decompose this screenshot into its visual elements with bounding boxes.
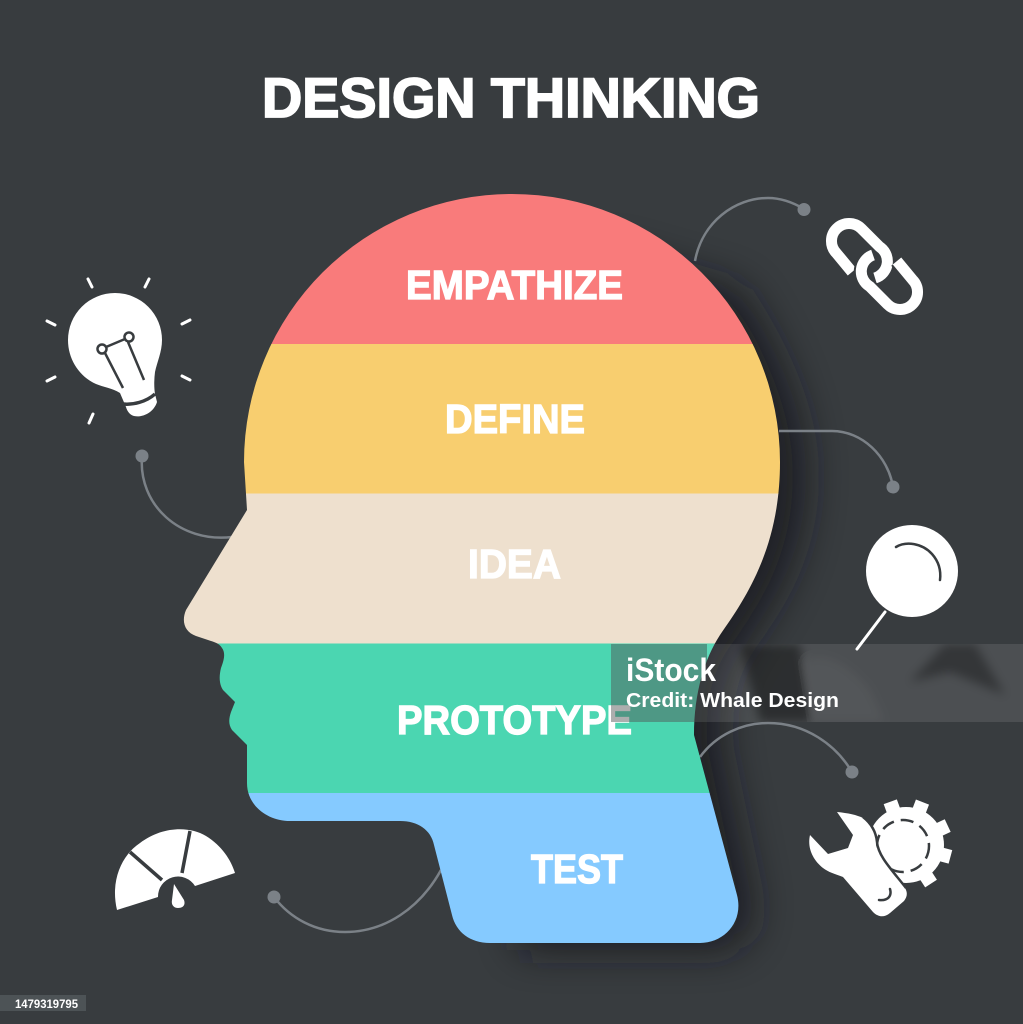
- band: prototype: [218, 644, 715, 794]
- icon: chain link: [831, 223, 918, 310]
- watermark logo: iStock: [626, 652, 716, 688]
- title: DESIGN THINKING: [262, 66, 760, 129]
- band: define: [244, 344, 780, 494]
- connector: bulb icon: [136, 450, 232, 538]
- image id tag: [0, 995, 86, 1011]
- label: empathize: EMPATHIZE: [406, 262, 623, 308]
- connector: magnifier icon: [779, 431, 900, 494]
- icon: wrench and gear: [809, 799, 952, 916]
- label: idea: IDEA: [468, 541, 561, 587]
- watermark band: [611, 644, 1023, 722]
- icon: magnifier: [857, 525, 958, 649]
- head shadow: [500, 250, 806, 950]
- head diagram: [170, 190, 790, 948]
- connector: gauge icon: [268, 870, 441, 932]
- band: test: [248, 793, 738, 943]
- label: prototype: PROTOTYPE: [397, 697, 632, 743]
- watermark credit: Credit: Whale Design: [626, 690, 839, 712]
- image id tag: 1479319795: [15, 999, 79, 1011]
- connector: link icon: [695, 198, 810, 261]
- band: empathize: [271, 194, 753, 344]
- band: idea: [170, 494, 790, 644]
- icon: light bulb: [47, 279, 190, 423]
- label: test: TEST: [531, 846, 623, 892]
- label: define: DEFINE: [445, 396, 585, 442]
- connector: gear icon: [700, 723, 858, 778]
- icon: gauge: [115, 829, 235, 910]
